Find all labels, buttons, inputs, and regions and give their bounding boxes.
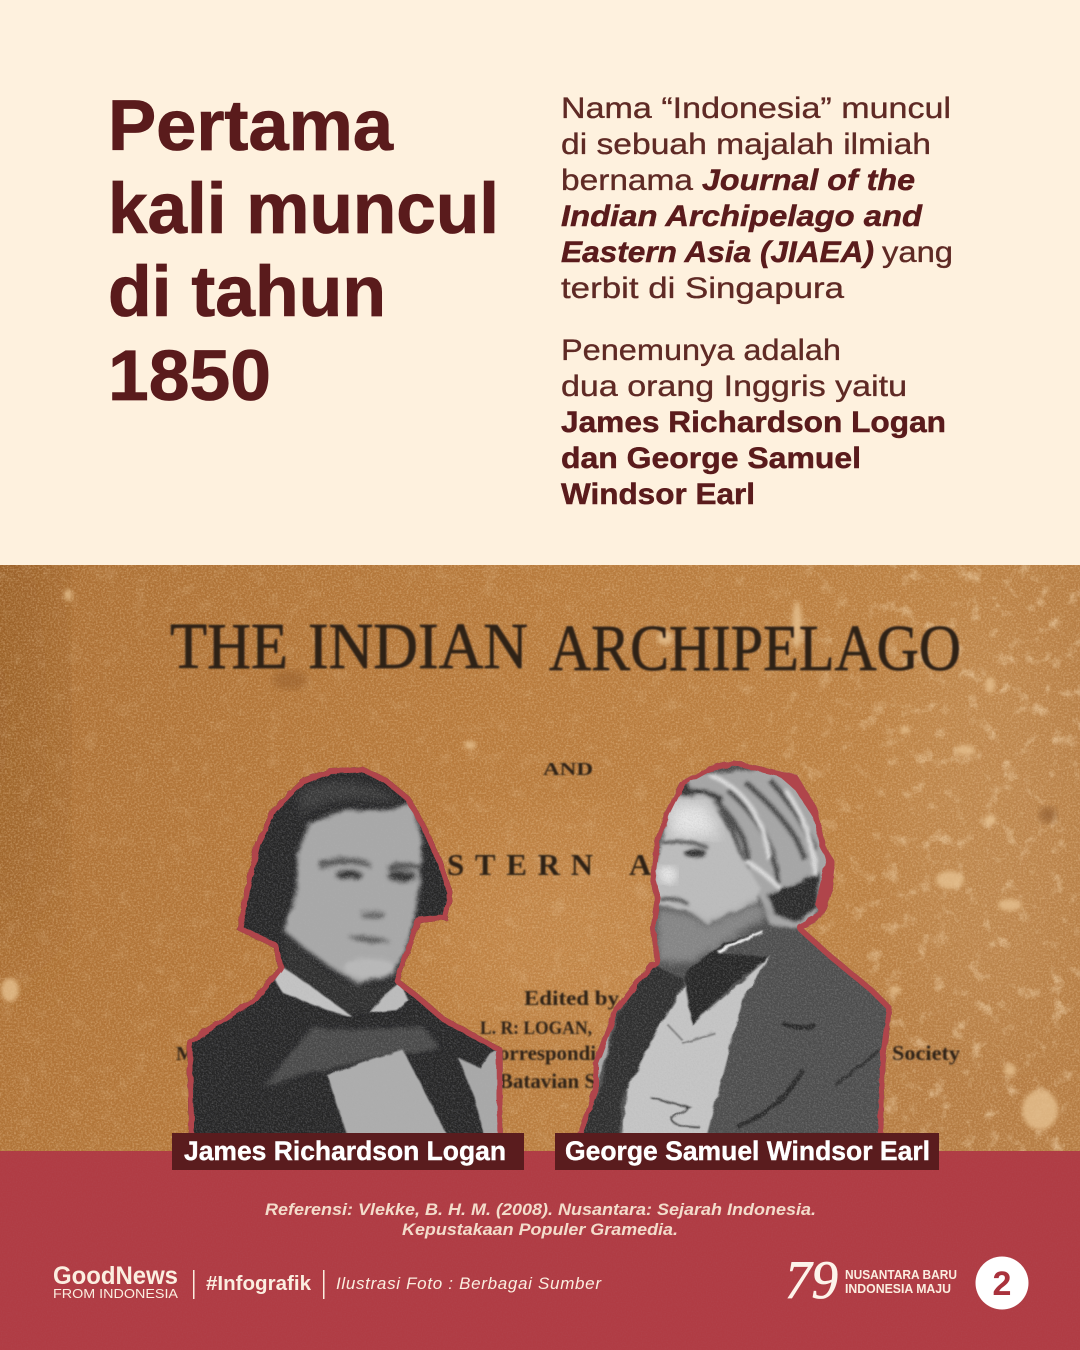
logo: GoodNews from Indonesia: GoodNews [53,1262,178,1290]
reference text: Kepustakaan Populer Gramedia. [402,1220,678,1239]
printed journal lettering: INDIAN [308,610,528,683]
reference text: Referensi: Vlekke, B. H. M. (2008). Nusantara: Sejarah Indonesia. [265,1200,816,1219]
text block: founders: dan George Samuel [561,442,861,475]
printed journal lettering: orrespondi [499,1041,596,1065]
footer tag: Infografik: #Infografik [206,1273,312,1295]
logo: 79 years Nusantara Baru Indonesia Maju [785,1250,957,1310]
title: di tahun [108,253,386,332]
printed journal lettering: THE [170,610,288,683]
name label: George Samuel Windsor Earl: George Samuel Windsor Earl [565,1136,930,1166]
text block: journal description: bernama [561,164,693,197]
logo: 79 years Nusantara Baru Indonesia Maju: 79 [785,1250,838,1310]
text block: founders [561,334,946,511]
printed journal lettering: A [629,847,652,882]
text block: journal description: yang [882,236,953,269]
logo: GoodNews from Indonesia: FROM INDONESIA [53,1286,178,1301]
page number badge [976,1256,1028,1310]
printed journal lettering [170,610,961,1093]
printed journal lettering: M [176,1043,195,1065]
red footer band [0,1151,1080,1350]
printed journal lettering: ARCHIPELAGO [549,612,961,685]
text block: journal description: di sebuah majalah ilmiah [561,128,931,161]
reference text [265,1200,816,1239]
printed journal lettering: L. R: LOGAN, [480,1018,592,1039]
logo: GoodNews from Indonesia [53,1262,178,1301]
text block: founders: Windsor Earl [561,478,755,511]
photo: aged journal page background [0,565,1080,1151]
text block: journal description: Eastern Asia (JIAEA) [561,236,874,269]
portrait: James Richardson Logan [186,766,504,1133]
text block: founders: dua orang Inggris yaitu [561,370,907,403]
text block: founders: James Richardson Logan [561,406,946,439]
photo credit: Ilustrasi Foto : Berbagai Sumber [336,1274,602,1293]
text block: journal description: terbit di Singapura [561,272,844,305]
title: Pertama [108,87,394,166]
title: kali muncul [108,170,499,249]
printed journal lettering: Batavian S [499,1069,596,1093]
footer tag: Infografik [193,1270,324,1299]
text block: founders: Penemunya adalah [561,334,841,367]
title: 1850 [108,337,271,416]
portrait: George Samuel Windsor Earl [577,760,892,1133]
printed journal lettering: Edited by [524,986,620,1010]
printed journal lettering: AND [543,759,593,779]
cream background [0,0,1080,566]
text block: journal description [561,92,953,305]
page number badge: 2 [993,1265,1011,1303]
text block: journal description: Indian Archipelago and [561,200,923,233]
logo: 79 years Nusantara Baru Indonesia Maju: INDONESIA MAJU [845,1282,951,1296]
printed journal lettering: STERN [447,847,593,882]
text block: journal description: Journal of the [702,164,915,197]
logo: 79 years Nusantara Baru Indonesia Maju: NUSANTARA BARU [845,1268,957,1282]
printed journal lettering: Society [892,1041,961,1065]
title [108,87,499,416]
name label: James Richardson Logan: James Richardson Logan [184,1136,506,1166]
text block: journal description: Nama “Indonesia” muncul [561,92,951,125]
